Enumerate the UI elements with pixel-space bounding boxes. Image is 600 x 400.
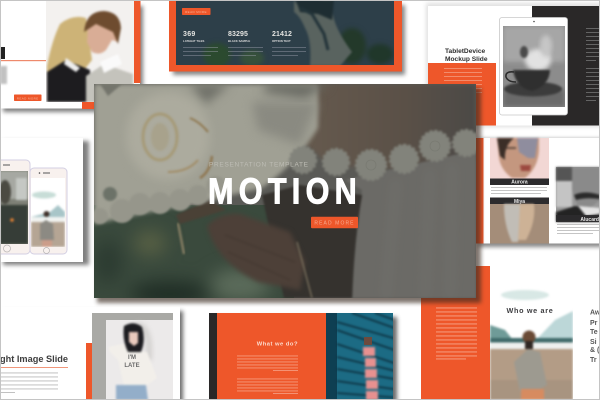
heading: Who we are — [507, 306, 553, 315]
button: READ MORE — [185, 10, 207, 14]
portrait: Miya: Miya — [514, 199, 525, 205]
side labels: Te — [590, 329, 598, 336]
photo: couple — [47, 11, 133, 102]
stat: 369: LATEHAT TILES — [183, 39, 204, 43]
stat: 21412 — [272, 31, 306, 56]
button: read more — [311, 217, 358, 228]
slide: who we are — [421, 266, 600, 400]
stat: 83295: BLACK SAMPLE — [228, 39, 250, 43]
heading: TabletDevice — [445, 48, 486, 55]
button: READ MORE — [17, 96, 39, 100]
subtitle: PRESENTATION TEMPLATE — [209, 162, 309, 168]
heading: What we do? — [257, 342, 298, 348]
side labels: Pr — [590, 320, 598, 327]
slide: what we do — [209, 313, 400, 400]
button — [14, 94, 42, 101]
slide: fashion couple — [0, 1, 143, 112]
slide shadow — [97, 88, 481, 303]
slide: stats on orange — [169, 0, 405, 75]
side labels: Si — [590, 339, 597, 346]
heading: Mockup Slide — [445, 56, 488, 63]
photo: bride with bouquet — [92, 84, 479, 306]
slide: right image — [0, 307, 183, 400]
stat: 21412: 21412 — [272, 31, 292, 38]
photo: blue wall — [326, 313, 393, 399]
button — [182, 8, 210, 15]
dark gap and hand — [262, 185, 362, 298]
tablet — [500, 18, 568, 115]
text block — [237, 356, 298, 394]
photo: man by lake — [490, 290, 573, 400]
photo: woman in tee: I'M — [128, 355, 136, 361]
photo: woman in tee: LATE — [124, 363, 140, 369]
stat: 369: 369 — [183, 31, 196, 38]
flowers — [94, 84, 318, 224]
phone: landscape — [30, 168, 67, 254]
stat: 369 — [183, 31, 218, 56]
portrait: Aurora: Aurora — [511, 180, 528, 186]
portrait: Alucard: Alucard — [580, 217, 599, 223]
rose centre — [126, 92, 212, 180]
side labels: Tr — [590, 357, 597, 364]
main slide: Motion title slide — [92, 84, 481, 306]
heading: ght Image Slide — [0, 354, 68, 365]
slide: portraits — [476, 138, 600, 247]
text column — [586, 28, 600, 101]
stat: 83295: 83295 — [228, 31, 248, 38]
stat: 83295 — [228, 31, 263, 56]
lace band — [290, 130, 479, 180]
phone: motorcycle — [0, 160, 30, 254]
slide: phone mockups — [0, 138, 89, 265]
side labels: & ( — [590, 347, 600, 354]
heading — [445, 48, 488, 63]
button: read more: READ MORE — [314, 221, 355, 227]
stat: 21412: OPTION TEXT — [272, 39, 291, 43]
title: MOTION — [208, 172, 357, 212]
slide: tablet mockup — [426, 3, 600, 127]
dress and skin — [300, 84, 476, 170]
side labels — [590, 310, 600, 364]
text block — [0, 372, 58, 393]
lace lower — [92, 176, 226, 224]
text block — [444, 68, 482, 97]
text block — [436, 308, 477, 359]
photo: woman in tee — [106, 320, 173, 400]
